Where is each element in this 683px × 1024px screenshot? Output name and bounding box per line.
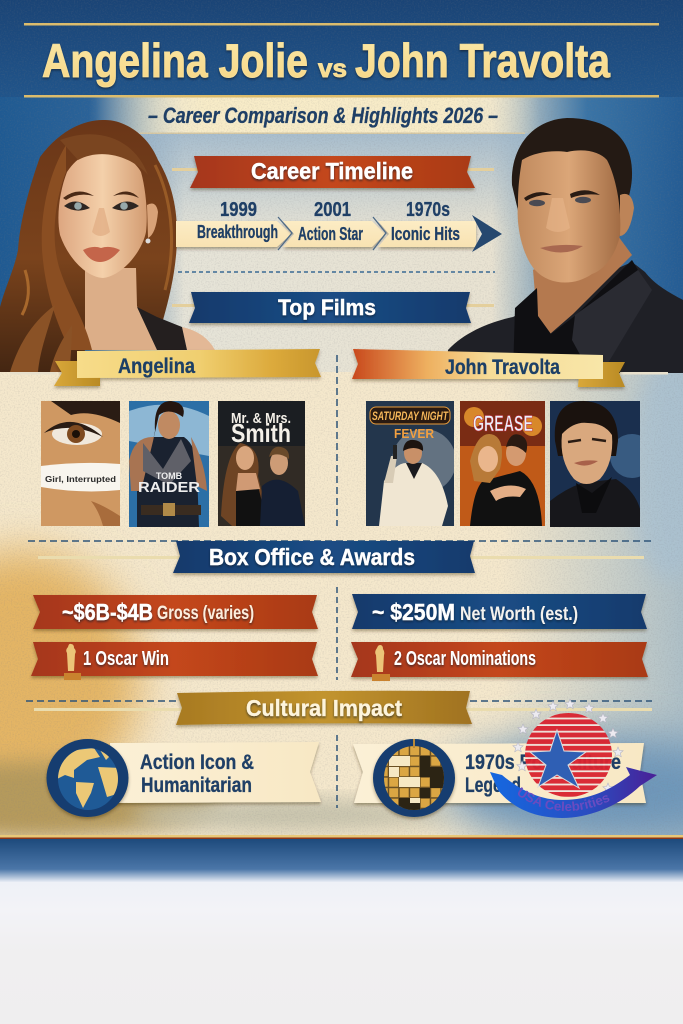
icon: disco ball: [373, 739, 455, 817]
timeline step: 1999: 1999: [220, 199, 257, 221]
timeline step: 1970s: [391, 199, 460, 244]
subtitle: – Career Comparison & Highlights 2026 –: [148, 103, 498, 128]
horizontal rule top: [24, 23, 659, 26]
jacket: [445, 262, 683, 373]
icon: globe: [46, 739, 128, 817]
icon: Oscar statue right: [372, 645, 390, 681]
ribbon: 1 Oscar win: 1 Oscar Win: [83, 648, 169, 670]
timeline arrow: [176, 215, 502, 252]
poster: John Travolta portrait: [550, 401, 640, 527]
timeline step: 1999: [197, 199, 278, 242]
poster: Tomb Raider: TOMB: [156, 471, 183, 481]
title: [42, 34, 611, 87]
face: [518, 150, 620, 283]
portrait: John Travolta: [445, 118, 683, 373]
heading ribbon: career timeline: Career Timeline: [251, 158, 413, 184]
ribbon: Angelina gross: [33, 595, 318, 629]
hair mass: [0, 120, 177, 372]
poster: Mr. & Mrs. Smith: Mr. & Mrs.: [231, 410, 291, 427]
impact text: Angelina: [140, 751, 254, 797]
timeline step: 2001: Action Star: [298, 224, 363, 244]
timeline step: 1970s: 1970s: [406, 199, 450, 221]
poster: Grease: [460, 401, 545, 526]
ribbon: Angelina gross: Gross (varies): [157, 603, 254, 624]
face: [58, 151, 147, 278]
title: Angelina Jolie: [42, 34, 308, 87]
section: career timeline: [172, 156, 502, 252]
ribbon: Travolta net worth: Net Worth (est.): [460, 604, 578, 625]
impact text: Travolta: [465, 751, 621, 797]
heading ribbon: cultural impact: Cultural Impact: [246, 695, 402, 721]
impact text: Angelina: Action Icon &: [140, 751, 254, 774]
heading ribbon: box office and awards: Box Office & Awards: [209, 544, 415, 570]
shoulders and neck: [85, 268, 157, 350]
frame bottom edge: [0, 835, 683, 840]
timeline step: 2001: 2001: [314, 199, 351, 221]
watermark: USA Celebrities: USA Celebrities: [518, 787, 610, 812]
poster: Saturday Night Fever: FEVER: [394, 426, 435, 441]
heading ribbon: top films: Top Films: [278, 295, 376, 320]
heading ribbon: career timeline: [172, 156, 494, 188]
center divider films: [336, 355, 338, 526]
shirt: [513, 260, 638, 373]
timeline step: 1970s: Iconic Hits: [391, 224, 460, 244]
ribbon: 2 Oscar nominations: [351, 642, 648, 681]
ribbon: Angelina gross: ~$6B-$4B: [62, 599, 153, 625]
card: Travolta impact: [353, 739, 646, 817]
center divider impact: [336, 735, 338, 808]
hair strands: [42, 145, 92, 350]
ribbon: Travolta net worth: [352, 594, 647, 629]
portrait: Angelina Jolie: [0, 120, 215, 372]
title: vs: [318, 55, 347, 83]
impact text: Travolta: Legend: [465, 774, 521, 797]
banner: John Travolta: [352, 349, 625, 387]
timeline step: 2001: [298, 199, 363, 244]
neck: [533, 225, 632, 334]
heading ribbon: cultural impact: [34, 691, 652, 725]
poster: Girl, Interrupted: Girl, Interrupted: [45, 474, 116, 484]
card: Angelina impact: [46, 739, 321, 817]
watermark: USA Celebrities: [490, 698, 657, 818]
ear: [620, 194, 634, 236]
hair: [512, 118, 632, 225]
dashed rule cultural impact: [26, 700, 652, 702]
impact text: Travolta: 1970s Pop Culture: [465, 751, 621, 774]
ribbon: 2 Oscar nominations: 2 Oscar Nominations: [394, 648, 536, 670]
ribbon: 1 Oscar win: [31, 642, 318, 680]
title: John Travolta: [355, 34, 611, 87]
heading ribbon: box office and awards: [38, 541, 644, 573]
poster: Saturday Night Fever: [366, 401, 454, 526]
poster: Girl, Interrupted: [41, 401, 120, 526]
poster: Tomb Raider: RAIDER: [138, 479, 200, 496]
impact text: Angelina: Humanitarian: [141, 774, 252, 797]
poster: Mr. & Mrs. Smith: Smith: [231, 418, 291, 448]
horizontal rule under title: [24, 95, 659, 98]
center divider awards: [336, 587, 338, 680]
icon: Oscar statue left: [64, 644, 81, 680]
timeline step: 1999: Breakthrough: [197, 222, 278, 242]
poster: Tomb Raider: [129, 401, 209, 527]
heading ribbon: top films: [172, 292, 494, 323]
dashed rule box office: [28, 540, 654, 542]
banner: Angelina: [54, 349, 321, 386]
ribbon: Travolta net worth: ~ $250M: [372, 599, 455, 625]
footer fade: [0, 839, 683, 1024]
poster: Mr. & Mrs. Smith: [218, 401, 305, 526]
banner: John Travolta: John Travolta: [445, 356, 560, 379]
banner: Angelina: Angelina: [118, 355, 195, 378]
